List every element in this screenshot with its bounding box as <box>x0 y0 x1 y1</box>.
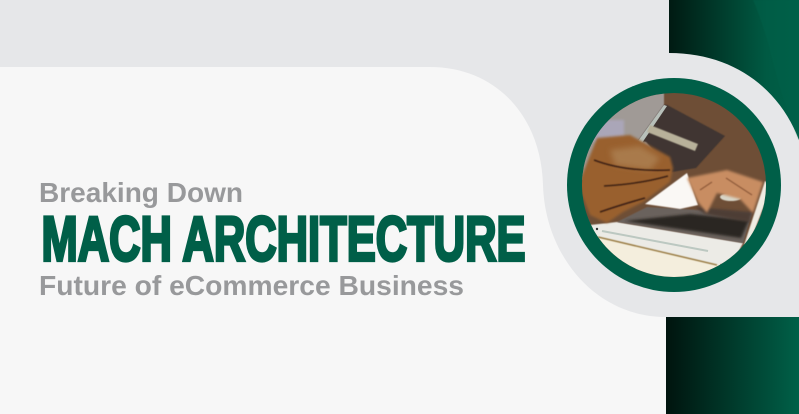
white object under hand <box>720 193 742 201</box>
keyboard <box>617 207 752 243</box>
white sleeve <box>645 173 698 209</box>
laptop screen edge <box>744 180 766 245</box>
credit card <box>638 105 725 172</box>
laptop body <box>590 222 743 265</box>
title block <box>39 177 526 301</box>
top right green block <box>669 0 799 140</box>
bottom right green block <box>666 317 799 414</box>
left hand <box>578 135 673 223</box>
heading: future of ecommerce business: Future of eCommerce Business <box>39 270 464 301</box>
heading: breaking down: Breaking Down <box>39 177 243 208</box>
heading: mach architecture: MACH ARCHITECTURE <box>42 204 526 274</box>
photo: hands with credit card and laptop <box>582 93 766 277</box>
light text panel <box>0 67 666 414</box>
desk <box>592 228 720 277</box>
right hand <box>687 170 763 213</box>
green circle ring <box>567 78 781 292</box>
